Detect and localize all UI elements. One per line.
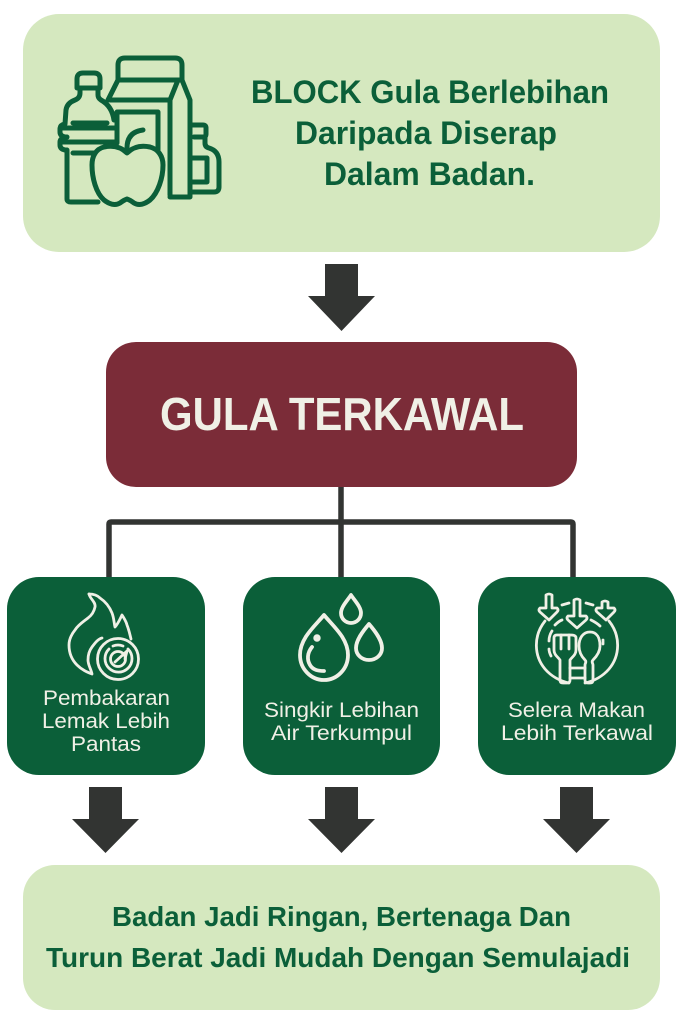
heading: top panel text: Dalam Badan. bbox=[324, 156, 535, 192]
panel: appetite bbox=[478, 577, 676, 775]
panel: top food panel bbox=[23, 14, 660, 252]
heading: top panel text: BLOCK Gula Berlebihan bbox=[251, 74, 609, 110]
icon: flame with gauge bbox=[69, 594, 138, 680]
panel: fat burning bbox=[7, 577, 205, 775]
label: water: Singkir Lebihan bbox=[264, 698, 419, 722]
label: water: Air Terkumpul bbox=[271, 721, 412, 745]
panel: gula terkawal: GULA TERKAWAL bbox=[160, 388, 524, 440]
connector tree bbox=[109, 486, 573, 578]
arrow: right bbox=[543, 787, 610, 853]
label: fat burning: Lemak Lebih bbox=[42, 709, 170, 733]
heading: top panel text bbox=[251, 74, 609, 192]
arrow: left bbox=[72, 787, 139, 853]
arrow: top to centre bbox=[308, 264, 375, 331]
heading: result text: Turun Berat Jadi Mudah Dengan Semulajadi bbox=[46, 942, 630, 973]
heading: result text bbox=[46, 901, 630, 973]
label: appetite: Lebih Terkawal bbox=[501, 721, 653, 745]
heading: top panel text: Daripada Diserap bbox=[295, 115, 557, 151]
panel: water bbox=[243, 577, 440, 775]
arrow: middle bbox=[308, 787, 375, 853]
panel: result bbox=[23, 865, 660, 1010]
label: fat burning: Pembakaran bbox=[43, 686, 170, 710]
panel: gula terkawal bbox=[106, 342, 577, 487]
label: appetite bbox=[501, 698, 653, 745]
label: water bbox=[264, 698, 419, 745]
label: appetite: Selera Makan bbox=[508, 698, 645, 722]
icon: food and drinks bbox=[60, 58, 219, 204]
heading: result text: Badan Jadi Ringan, Bertenaga Dan bbox=[112, 901, 571, 932]
label: fat burning: Pantas bbox=[71, 732, 141, 756]
icon: water drops bbox=[300, 595, 382, 680]
label: fat burning bbox=[42, 686, 170, 756]
icon: plate with arrows bbox=[536, 594, 618, 683]
